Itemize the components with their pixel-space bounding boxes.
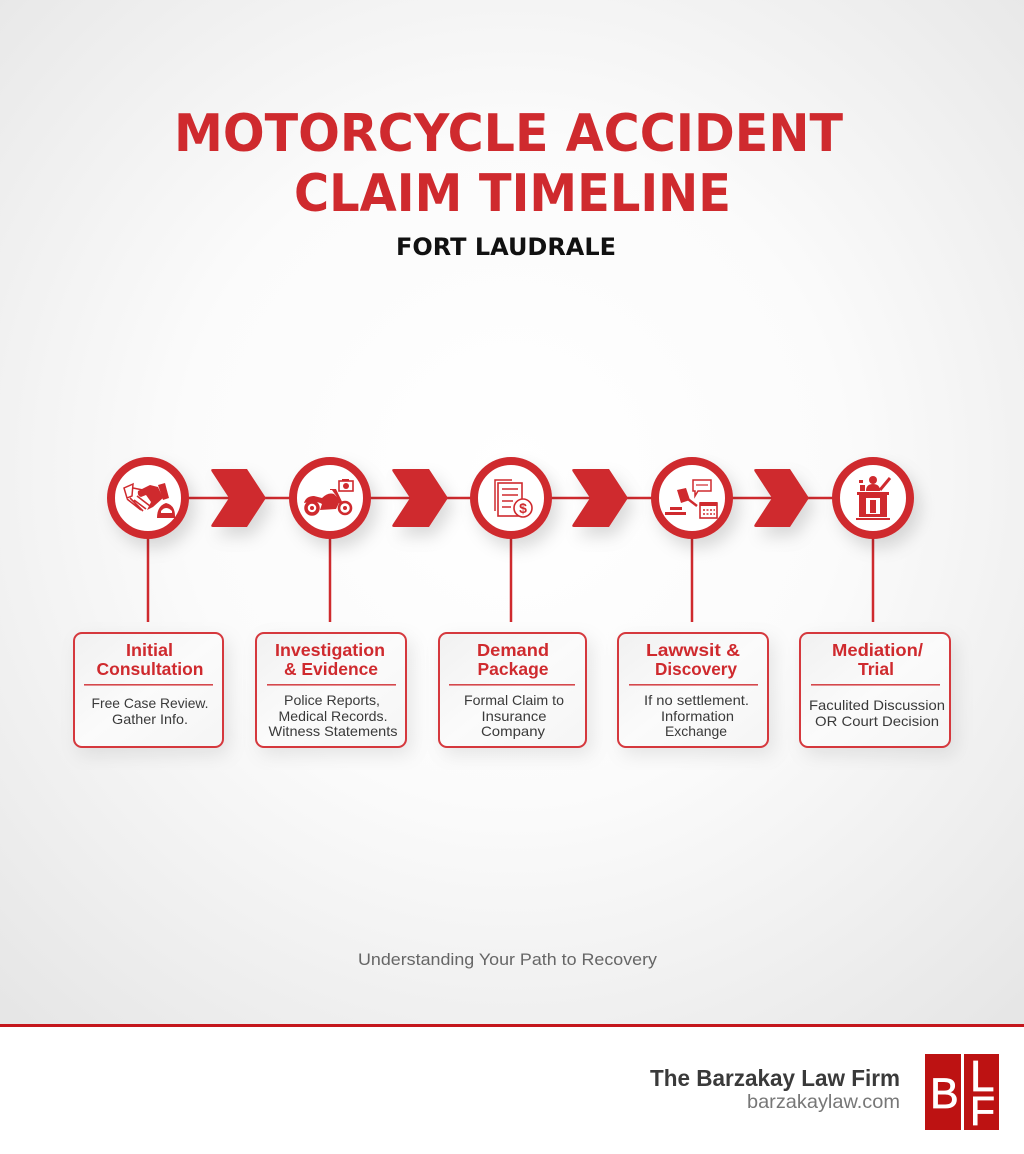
card 2: investigation and evidence: & Evidence <box>284 659 378 679</box>
card 3: demand package <box>439 633 586 747</box>
step 3 icon: documents and dollar <box>474 461 548 535</box>
logo: F <box>970 1088 995 1134</box>
card 3: demand package: Company <box>481 723 545 739</box>
card 4: lawsuit and discovery <box>618 633 768 747</box>
step 1 icon: handshake and helmet <box>111 461 185 535</box>
firm name: The Barzakay Law Firm <box>650 1065 900 1091</box>
card 4: lawsuit and discovery: Information <box>661 708 734 724</box>
card 3: demand package: Demand <box>477 640 549 660</box>
timeline connector <box>148 498 873 622</box>
card 4: lawsuit and discovery: Exchange <box>665 723 727 739</box>
tagline: Understanding Your Path to Recovery <box>358 950 658 969</box>
card 4: lawsuit and discovery: If no settlement. <box>644 692 749 708</box>
title: CLAIM TIMELINE <box>294 164 731 224</box>
card 1: initial consultation: Consultation <box>96 659 204 679</box>
card 2: investigation and evidence: Investigation <box>275 640 385 660</box>
card 5: mediation and trial: Faculited Discussion <box>809 697 945 713</box>
card 2: investigation and evidence <box>256 633 406 747</box>
footer <box>0 1024 1024 1154</box>
logo: L <box>970 1052 994 1101</box>
title <box>174 104 843 224</box>
logo: B <box>930 1070 959 1118</box>
card 5: mediation and trial <box>800 633 950 747</box>
step 4 icon: gavel, speech bubble, calendar <box>655 461 729 535</box>
step 5 icon: courtroom podium <box>836 461 910 535</box>
card 4: lawsuit and discovery: Lawwsit & <box>646 640 740 660</box>
card 2: investigation and evidence: Medical Records. <box>278 708 388 724</box>
card 1: initial consultation <box>74 633 223 747</box>
card 3: demand package: Formal Claim to <box>464 692 564 708</box>
arrow 2 <box>392 469 448 527</box>
card 1: initial consultation: Gather Info. <box>112 711 188 727</box>
arrow 4 <box>754 469 809 527</box>
firm url: barzakaylaw.com <box>747 1091 900 1113</box>
subtitle: FORT LAUDRALE <box>396 233 616 261</box>
logo <box>925 1052 999 1134</box>
card 5: mediation and trial: OR Court Decision <box>815 713 939 729</box>
card 3: demand package: Package <box>478 659 549 679</box>
title: MOTORCYCLE ACCIDENT <box>174 104 843 164</box>
card 5: mediation and trial: Trial <box>858 659 894 679</box>
card 1: initial consultation: Free Case Review. <box>92 695 208 711</box>
card 5: mediation and trial: Mediation/ <box>832 640 923 660</box>
arrow 1 <box>211 469 266 527</box>
step 2 icon: motorcycle and camera <box>293 461 367 535</box>
card 4: lawsuit and discovery: Discovery <box>655 659 737 679</box>
card 1: initial consultation: Initial <box>126 640 173 660</box>
card 2: investigation and evidence: Witness Statements <box>268 723 398 739</box>
card 3: demand package: Insurance <box>482 708 547 724</box>
card 2: investigation and evidence: Police Reports, <box>284 692 380 708</box>
arrow 3 <box>572 469 628 527</box>
step 3 icon: documents and dollar: $ <box>519 500 527 516</box>
